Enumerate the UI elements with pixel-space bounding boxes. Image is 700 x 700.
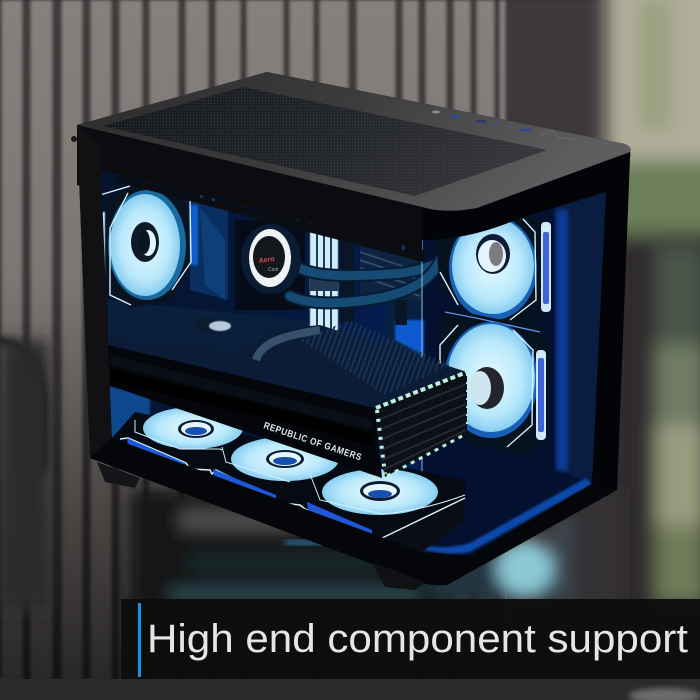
top fan shadows beam [117,176,423,262]
pump logo: Aero [258,256,275,265]
gpu end heatsink [375,372,467,477]
bottom fan light bar 3 [307,502,372,535]
aio pump head: Cool [268,267,278,273]
motherboard [108,220,430,405]
right lower fan [437,308,550,456]
bottom fan 2 [231,437,339,481]
left frame post [77,125,112,458]
bottom fan bay [112,407,465,552]
rear fan [100,186,191,308]
accent line [138,603,141,677]
rear vrm heatsink [360,246,422,325]
ram modules [310,232,354,332]
bottom fan 1 [143,407,243,449]
right side glass [556,191,606,482]
pc case [71,72,631,590]
cooling tubes [290,236,470,303]
front panel io [432,110,576,140]
front glass edge [421,240,423,552]
right upper fan [436,212,551,325]
gpu front shroud [108,345,382,478]
mesh vent [103,87,547,196]
caption text: High end component support [147,617,688,661]
gpu brand text: REPUBLIC OF GAMERS [262,420,363,464]
top panel [77,72,631,211]
gpu top shroud [108,325,467,408]
back cooler block [190,200,228,300]
case interior [100,160,606,556]
right frame post [592,150,630,490]
bottom fan light bar 1 [127,438,185,466]
bottom fan light bar 2 [213,469,276,500]
case feet [97,462,140,488]
graphics card [108,320,467,478]
bottom frame strip [90,438,617,585]
caption bar [121,599,700,679]
bottom fan 3 [322,469,438,515]
headphones silhouette [0,340,45,470]
front top frame band [77,125,422,250]
case body [77,72,630,585]
aio pump head [241,224,301,294]
front right frame curve [422,150,630,240]
chassis screw [71,136,77,142]
